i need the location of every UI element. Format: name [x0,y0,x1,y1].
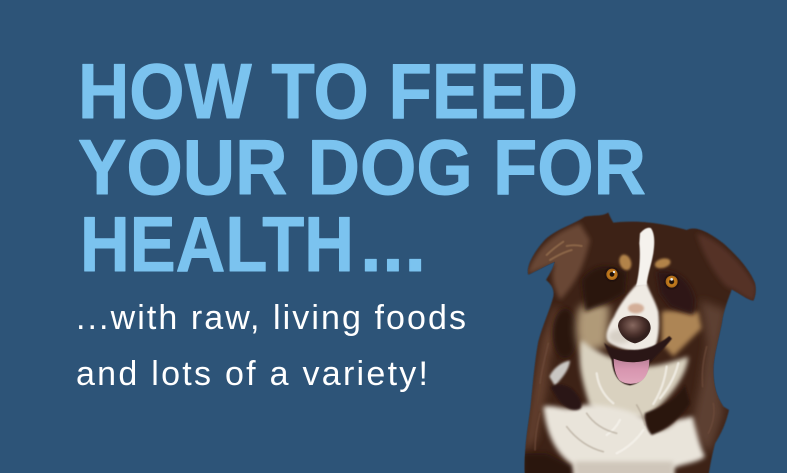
tongue [614,359,649,384]
left chest dark patch [551,384,581,410]
right ear fur [697,233,757,302]
white muzzle [607,283,659,351]
subtitle: ...with raw, living foods [76,299,466,337]
right chest dark patch [645,385,690,435]
chest fur strands [597,363,678,453]
left eye [605,267,619,281]
dog photo [523,213,757,473]
dog silhouette [525,213,756,473]
dark neck patch [552,308,578,358]
side fur strands [535,343,714,450]
shoulder tuft [549,361,570,386]
forehead blaze [636,228,654,286]
eye shadow right [657,271,695,315]
right eye [664,274,679,289]
right cheek tan [662,311,702,357]
chest fur shadows [567,405,645,452]
bottom left dark [523,453,573,473]
title: HEALTH [80,200,354,288]
dog fur layers [523,223,757,473]
subtitle [76,299,466,393]
title: ... [360,200,426,288]
nose [618,316,651,343]
left cheek tan [576,302,610,353]
title: HOW TO FEED [78,47,578,135]
banner [77,63,756,473]
title: YOUR DOG FOR [78,123,646,211]
lower chest grey [575,462,673,473]
right side fur [690,300,727,453]
left ear fur [527,223,590,300]
left ear highlights [547,242,582,260]
muzzle shading [628,303,644,313]
left side fur [526,307,560,450]
cream neck ruff [580,340,688,420]
title [78,47,646,288]
cheek shadow under muzzle [608,329,632,344]
eye shadow left [582,266,627,312]
eyebrows [617,253,633,272]
white chest band [543,405,705,473]
subtitle: and lots of a variety! [76,355,428,393]
mouth [604,336,672,385]
